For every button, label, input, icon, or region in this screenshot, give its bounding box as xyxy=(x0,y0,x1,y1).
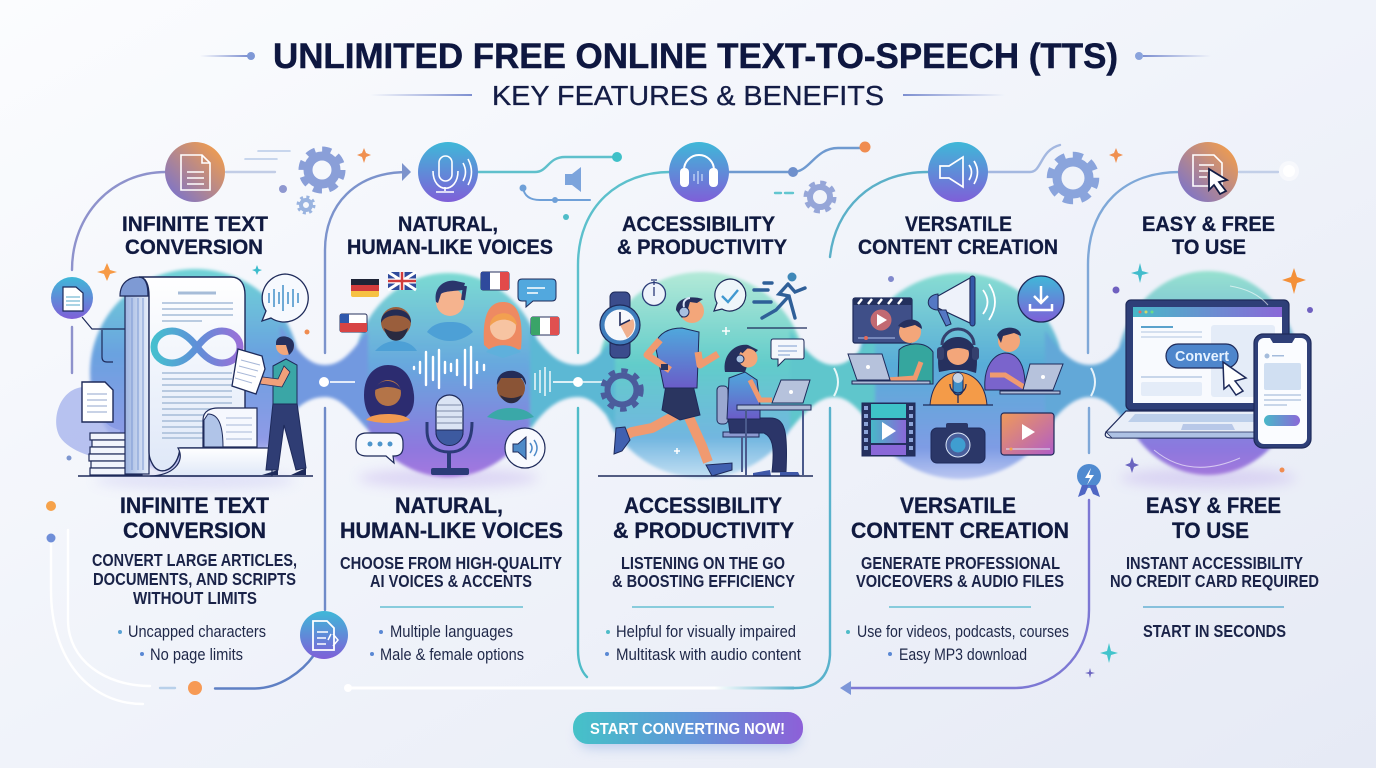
description xyxy=(856,553,1064,591)
runner person xyxy=(614,297,732,476)
bullets: Multitask with audio content xyxy=(616,646,801,664)
heading: EASY & FREE xyxy=(1146,493,1281,518)
flag: uk xyxy=(388,272,416,290)
illustration 2: voices xyxy=(340,272,559,475)
icon: medal badge xyxy=(1077,464,1101,497)
call to action button xyxy=(573,712,803,748)
illustration 4: content creation xyxy=(848,276,1064,463)
film strip xyxy=(862,403,915,456)
description: NO CREDIT CARD REQUIRED xyxy=(1110,571,1319,591)
title: UNLIMITED FREE ONLINE TEXT-TO-SPEECH (TTS) xyxy=(273,37,1118,76)
person with paper xyxy=(232,336,306,475)
ground line xyxy=(78,475,313,477)
voice waveform xyxy=(414,347,484,388)
upper heading: accessibility: ACCESSIBILITY xyxy=(622,213,775,236)
gear: top-middle xyxy=(806,182,834,212)
panel: feature 4 text xyxy=(846,493,1069,664)
illustration 3: accessibility xyxy=(598,272,813,476)
megaphone xyxy=(928,276,995,326)
convert button: Convert xyxy=(1175,349,1229,365)
heading: VERSATILE xyxy=(900,493,1016,518)
bullets: Helpful for visually impaired xyxy=(616,623,796,641)
panel: feature 5 text xyxy=(1110,493,1319,641)
bullets: Uncapped characters xyxy=(128,623,266,641)
video panel xyxy=(853,298,912,343)
person: top center man xyxy=(427,281,473,341)
column 1 heading icon xyxy=(165,142,225,202)
subtitle: KEY FEATURES & BENEFITS xyxy=(492,80,884,111)
bullets: No page limits xyxy=(150,646,243,664)
description: GENERATE PROFESSIONAL xyxy=(861,553,1060,573)
connectors xyxy=(51,145,1278,728)
flowchart connector xyxy=(82,317,125,362)
illustration 1: scroll and person xyxy=(51,263,313,476)
description: & BOOSTING EFFICIENCY xyxy=(612,571,795,591)
video player xyxy=(1001,413,1054,455)
bullets xyxy=(118,623,266,664)
flag: italy xyxy=(531,317,559,335)
small document xyxy=(82,382,113,422)
person: lower-right man xyxy=(487,371,534,420)
heading: HUMAN-LIKE VOICES xyxy=(340,518,563,543)
person: center host with mic xyxy=(923,329,993,405)
description: INSTANT ACCESSIBILITY xyxy=(1126,553,1303,573)
description: VOICEOVERS & AUDIO FILES xyxy=(856,571,1064,591)
gear: top-left small xyxy=(298,197,314,213)
chat bubble blue xyxy=(518,279,556,307)
column 2 heading icon xyxy=(418,142,478,202)
flag: chile xyxy=(340,314,367,332)
check bubble xyxy=(714,279,746,311)
upper heading: versatile xyxy=(858,213,1058,259)
bullets xyxy=(605,623,801,664)
left blue crescent xyxy=(56,387,120,462)
heading: NATURAL, xyxy=(395,493,503,518)
illustration 5: laptop and phone xyxy=(1105,286,1311,467)
icon: node document xyxy=(300,611,348,659)
bullets: Male & female options xyxy=(380,646,524,664)
icon: doc circle xyxy=(51,277,93,319)
description: AI VOICES & ACCENTS xyxy=(370,571,532,591)
heading xyxy=(613,493,794,543)
description xyxy=(340,553,562,591)
speaker circle xyxy=(505,428,545,468)
panel: feature 1 text xyxy=(92,493,297,664)
heading: INFINITE TEXT xyxy=(120,493,270,518)
bullets: Easy MP3 download xyxy=(899,646,1027,664)
convert button xyxy=(1166,344,1238,368)
column 5 heading icon xyxy=(1178,142,1238,202)
upper heading: versatile: VERSATILE xyxy=(905,213,1012,236)
camera xyxy=(931,423,985,463)
side sound waves xyxy=(535,367,550,396)
upper heading: easy and free: TO USE xyxy=(1172,236,1246,259)
description: LISTENING ON THE GO xyxy=(621,553,785,573)
flag: france xyxy=(481,272,509,290)
bullets xyxy=(370,623,524,664)
heading xyxy=(340,493,563,543)
bullets: Use for videos, podcasts, courses xyxy=(857,623,1069,641)
closing line: START IN SECONDS xyxy=(1143,621,1286,641)
person: left with laptop xyxy=(848,320,933,384)
microphone xyxy=(427,395,472,475)
upper heading: natural voices xyxy=(347,213,553,259)
stopwatch xyxy=(642,280,666,306)
description xyxy=(612,553,795,591)
description: DOCUMENTS, AND SCRIPTS xyxy=(93,569,296,589)
flag: germany xyxy=(351,279,379,297)
gear xyxy=(602,370,642,410)
upper heading: accessibility xyxy=(617,213,787,259)
page text lines xyxy=(162,293,233,438)
bottom scroll xyxy=(150,448,272,476)
bullets xyxy=(846,623,1069,664)
infinity symbol xyxy=(154,331,240,363)
heading: & PRODUCTIVITY xyxy=(613,518,794,543)
decorative nodes xyxy=(46,142,1313,695)
upper heading: easy and free: EASY & FREE xyxy=(1142,213,1275,236)
heading xyxy=(851,493,1069,543)
cursor xyxy=(1223,362,1246,395)
scroll tube xyxy=(120,277,149,474)
call to action button: START CONVERTING NOW! xyxy=(590,721,785,738)
small page curl xyxy=(203,408,257,447)
upper heading: easy and free xyxy=(1142,213,1275,259)
person: right with laptop xyxy=(985,328,1063,394)
chat bubble xyxy=(771,339,804,366)
heading: CONVERSION xyxy=(123,518,266,543)
upper heading: infinite text conversion: CONVERSION xyxy=(125,236,263,259)
person: right woman xyxy=(484,302,522,358)
bullets: Multiple languages xyxy=(390,623,513,641)
panel: feature 2 text xyxy=(340,493,563,664)
panel: feature 3 text xyxy=(605,493,801,664)
arrow: into natural voices xyxy=(402,163,411,181)
description: CHOOSE FROM HIGH-QUALITY xyxy=(340,553,562,573)
person: lower-left woman xyxy=(364,365,414,423)
heading: CONTENT CREATION xyxy=(851,518,1069,543)
heading: TO USE xyxy=(1172,518,1249,543)
upper heading: natural voices: HUMAN-LIKE VOICES xyxy=(347,236,553,259)
arrow: bottom flow xyxy=(840,681,851,695)
seated person with laptop xyxy=(717,345,811,476)
speech bubble waveform xyxy=(262,274,308,322)
laptop xyxy=(1105,300,1289,438)
upper heading: natural voices: NATURAL, xyxy=(398,213,498,236)
gear: top-left large xyxy=(302,150,342,190)
icon: speaker top xyxy=(565,167,581,192)
background blobs band xyxy=(90,269,1300,490)
phone xyxy=(1254,334,1311,448)
paper stack xyxy=(89,433,142,475)
title block xyxy=(200,37,1211,111)
upper heading: versatile: CONTENT CREATION xyxy=(858,236,1058,259)
person: left man beard xyxy=(375,307,417,351)
download circle xyxy=(1018,276,1064,322)
heading xyxy=(1146,493,1281,543)
small runner xyxy=(747,272,807,328)
column 3 heading icon xyxy=(669,142,729,202)
ground line xyxy=(598,475,813,477)
description: CONVERT LARGE ARTICLES, xyxy=(92,550,297,570)
heading xyxy=(120,493,270,543)
heading: ACCESSIBILITY xyxy=(624,493,782,518)
upper heading: infinite text conversion xyxy=(122,213,268,259)
upper heading: infinite text conversion: INFINITE TEXT xyxy=(122,213,268,236)
typing bubble xyxy=(356,433,403,463)
upper heading: accessibility: & PRODUCTIVITY xyxy=(617,236,787,259)
column 4 heading icon xyxy=(928,142,988,202)
description xyxy=(1110,553,1319,591)
description: WITHOUT LIMITS xyxy=(133,588,257,608)
description xyxy=(92,550,297,608)
main page xyxy=(139,277,245,471)
gear: top-right large xyxy=(1050,155,1096,201)
wrist watch xyxy=(600,292,640,358)
